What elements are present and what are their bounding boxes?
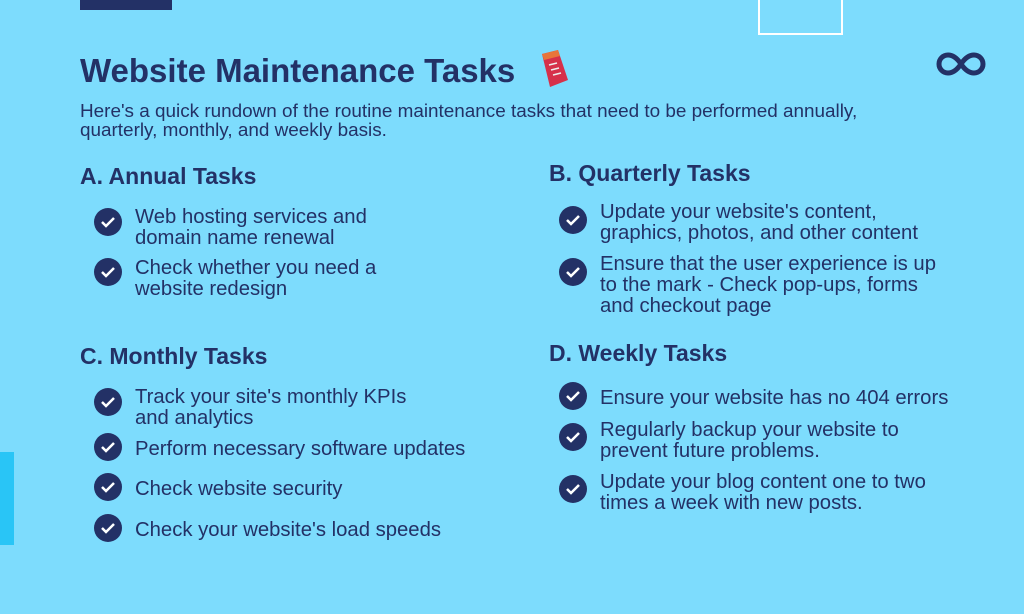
item text: Update your blog content one to two xyxy=(600,471,926,493)
item text xyxy=(600,471,926,514)
item text: Check your website's load speeds xyxy=(135,519,441,541)
subtitle: quarterly, monthly, and weekly basis. xyxy=(80,120,387,141)
item text: Check website security xyxy=(135,478,342,500)
check icon xyxy=(94,208,122,236)
item text: Check whether you need a xyxy=(135,257,376,279)
heading A: A. Annual Tasks xyxy=(80,163,256,189)
decorative top-left bar xyxy=(80,0,172,10)
check icon xyxy=(94,258,122,286)
item text: Ensure your website has no 404 errors xyxy=(600,387,948,409)
item text xyxy=(135,257,376,300)
check icon xyxy=(559,475,587,503)
item text: and analytics xyxy=(135,407,253,429)
item text: domain name renewal xyxy=(135,227,335,249)
panel: weekly tasks xyxy=(549,340,948,514)
subtitle xyxy=(80,101,857,141)
check icon xyxy=(94,388,122,416)
panel: annual tasks xyxy=(80,163,376,300)
item text: times a week with new posts. xyxy=(600,492,863,514)
item text: graphics, photos, and other content xyxy=(600,222,918,244)
icon: clipboard xyxy=(542,50,568,87)
heading C: C. Monthly Tasks xyxy=(80,343,267,369)
item text: to the mark - Check pop-ups, forms xyxy=(600,274,918,296)
check icon xyxy=(94,433,122,461)
item text: Web hosting services and xyxy=(135,206,367,228)
item text: prevent future problems. xyxy=(600,440,820,462)
check icon xyxy=(559,206,587,234)
item text: Regularly backup your website to xyxy=(600,419,899,441)
check icon xyxy=(94,473,122,501)
heading B: B. Quarterly Tasks xyxy=(549,160,751,186)
item text xyxy=(600,253,936,317)
check icon xyxy=(559,258,587,286)
check icon xyxy=(559,423,587,451)
item text xyxy=(600,419,899,462)
title: Website Maintenance Tasks xyxy=(80,52,515,89)
item text: Track your site's monthly KPIs xyxy=(135,386,406,408)
item text: Update your website's content, xyxy=(600,201,877,223)
check icon xyxy=(559,382,587,410)
item text: website redesign xyxy=(135,278,287,300)
logo: infinity xyxy=(936,52,986,76)
decorative left cyan bar xyxy=(0,452,14,545)
panel: quarterly tasks xyxy=(549,160,936,317)
item text xyxy=(135,206,367,249)
item text: and checkout page xyxy=(600,295,771,317)
heading D: D. Weekly Tasks xyxy=(549,340,727,366)
item text: Ensure that the user experience is up xyxy=(600,253,936,275)
panel: monthly tasks xyxy=(80,343,465,542)
check icon xyxy=(94,514,122,542)
item text: Perform necessary software updates xyxy=(135,438,465,460)
subtitle: Here's a quick rundown of the routine maintenance tasks that need to be performed annually, xyxy=(80,101,857,122)
item text xyxy=(600,201,918,244)
item text xyxy=(135,386,406,429)
decorative white square outline xyxy=(758,0,843,35)
